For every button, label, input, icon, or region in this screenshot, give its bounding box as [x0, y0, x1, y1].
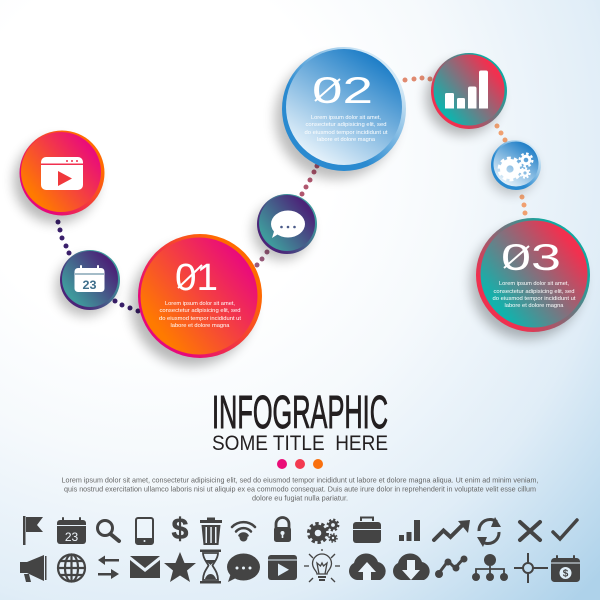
icon: video window	[41, 157, 83, 190]
icon: hourglass	[200, 550, 221, 584]
panel: step 01	[131, 234, 262, 366]
icon: globe	[58, 554, 85, 582]
node: chat	[253, 194, 317, 260]
body paragraph: Lorem ipsum dolor sit amet, consectetur adipisicing elit, sed do eiusmod tempor incididunt ut labore et dolore magna aliqua. Ut enim ad minim veniam,	[62, 476, 538, 484]
icon grid	[20, 513, 580, 584]
icon: refresh	[477, 517, 501, 547]
dotted connector: 02 to chart	[402, 76, 432, 82]
icon: trend arrow	[434, 520, 470, 540]
text: step 02 description	[304, 115, 388, 143]
text: step 01 description: consectetur adipisicing elit, sed	[160, 308, 240, 314]
icon: line nodes	[435, 556, 468, 578]
icon: dollar calendar	[551, 555, 580, 582]
text: step 03 description: do eiusmod tempor incididunt ut	[492, 296, 576, 302]
icon: cross	[520, 522, 540, 540]
text: step 01 description	[159, 301, 241, 329]
icon: padlock	[274, 518, 291, 542]
number 02: 02	[312, 70, 373, 111]
text: step 03 description: labore et dolore magna	[504, 303, 564, 309]
number 01: 01	[175, 257, 218, 299]
title: INFOGRAPHIC	[212, 386, 388, 438]
icon: speech bubble	[271, 210, 305, 238]
text: step 03 description: consectetur adipisicing elit, sed	[494, 289, 574, 295]
icon: calendar: 23	[65, 530, 78, 544]
panel: step 03	[471, 218, 590, 339]
icon: star	[164, 552, 196, 582]
dotted connector: chart to gears	[494, 124, 508, 142]
text: step 02 description: labore et dolore magna	[317, 137, 376, 143]
icon: gears	[308, 520, 338, 542]
icon: video window	[268, 555, 297, 580]
number 03: 03	[501, 237, 561, 278]
icon: trash can	[200, 518, 222, 545]
icon: check mark	[553, 520, 577, 539]
text: step 02 description: consectetur adipisicing elit, sed	[306, 122, 386, 128]
subtitle: SOME TITLE HERE	[212, 432, 388, 455]
panel: step 02	[275, 47, 406, 179]
icon: wifi	[232, 522, 255, 542]
text: step 03 description: Lorem ipsum dolor sit amet,	[499, 281, 569, 287]
body paragraph: dolore eu fugiat nulla pariatur.	[252, 494, 348, 502]
icon: light bulb	[304, 549, 340, 582]
dotted connector: 01 to chat	[254, 250, 270, 268]
icon: crosshair node	[514, 553, 548, 583]
icon: megaphone	[20, 555, 46, 582]
dotted connector: calendar to 01	[112, 298, 140, 314]
node: calendar	[56, 250, 120, 316]
text: step 02 description: Lorem ipsum dolor sit amet,	[311, 115, 381, 121]
text: step 01 description: do eiusmod tempor incididunt ut	[159, 316, 241, 322]
dotted connector: video to calendar	[56, 220, 72, 256]
dotted connector: chat to 02	[300, 164, 320, 196]
icon: flag	[23, 516, 43, 545]
icon: calendar 23: 23	[82, 278, 97, 292]
icon: magnifier	[98, 520, 119, 541]
icon: dollar: $	[172, 513, 189, 546]
node: bar chart	[426, 53, 507, 135]
icon: bars	[445, 70, 488, 108]
icon: signal bars	[399, 520, 420, 541]
icon: hierarchy	[472, 554, 508, 581]
icon: cloud download	[393, 553, 430, 580]
icon: briefcase	[353, 518, 381, 543]
decorative three dots	[277, 459, 323, 469]
text: step 01 description: Lorem ipsum dolor sit amet,	[165, 301, 235, 307]
node: gears	[488, 140, 541, 194]
text: step 02 description: do eiusmod tempor incididunt ut	[304, 130, 388, 136]
text: step 01 description: labore et dolore magna	[170, 323, 230, 329]
icon: tablet	[136, 518, 153, 544]
icon: transfer arrows	[98, 556, 119, 579]
text: step 03 description	[492, 281, 576, 309]
body paragraph: quis nostrud exercitation ullamco laboris nisi ut aliquip ex ea commodo consequat. Duis aute irure dolor in reprehenderit in voluptate velit esse cillum	[64, 484, 536, 494]
icon: speech bubble	[227, 554, 260, 582]
icon: cloud upload	[349, 553, 386, 580]
dotted connector: gears to 03	[520, 194, 528, 216]
icon: dollar calendar: $	[563, 568, 569, 580]
icon: gears	[499, 154, 532, 180]
node: video	[14, 130, 104, 223]
icon: calendar	[57, 517, 86, 544]
body paragraph	[62, 476, 538, 502]
icon: envelope	[130, 556, 160, 578]
